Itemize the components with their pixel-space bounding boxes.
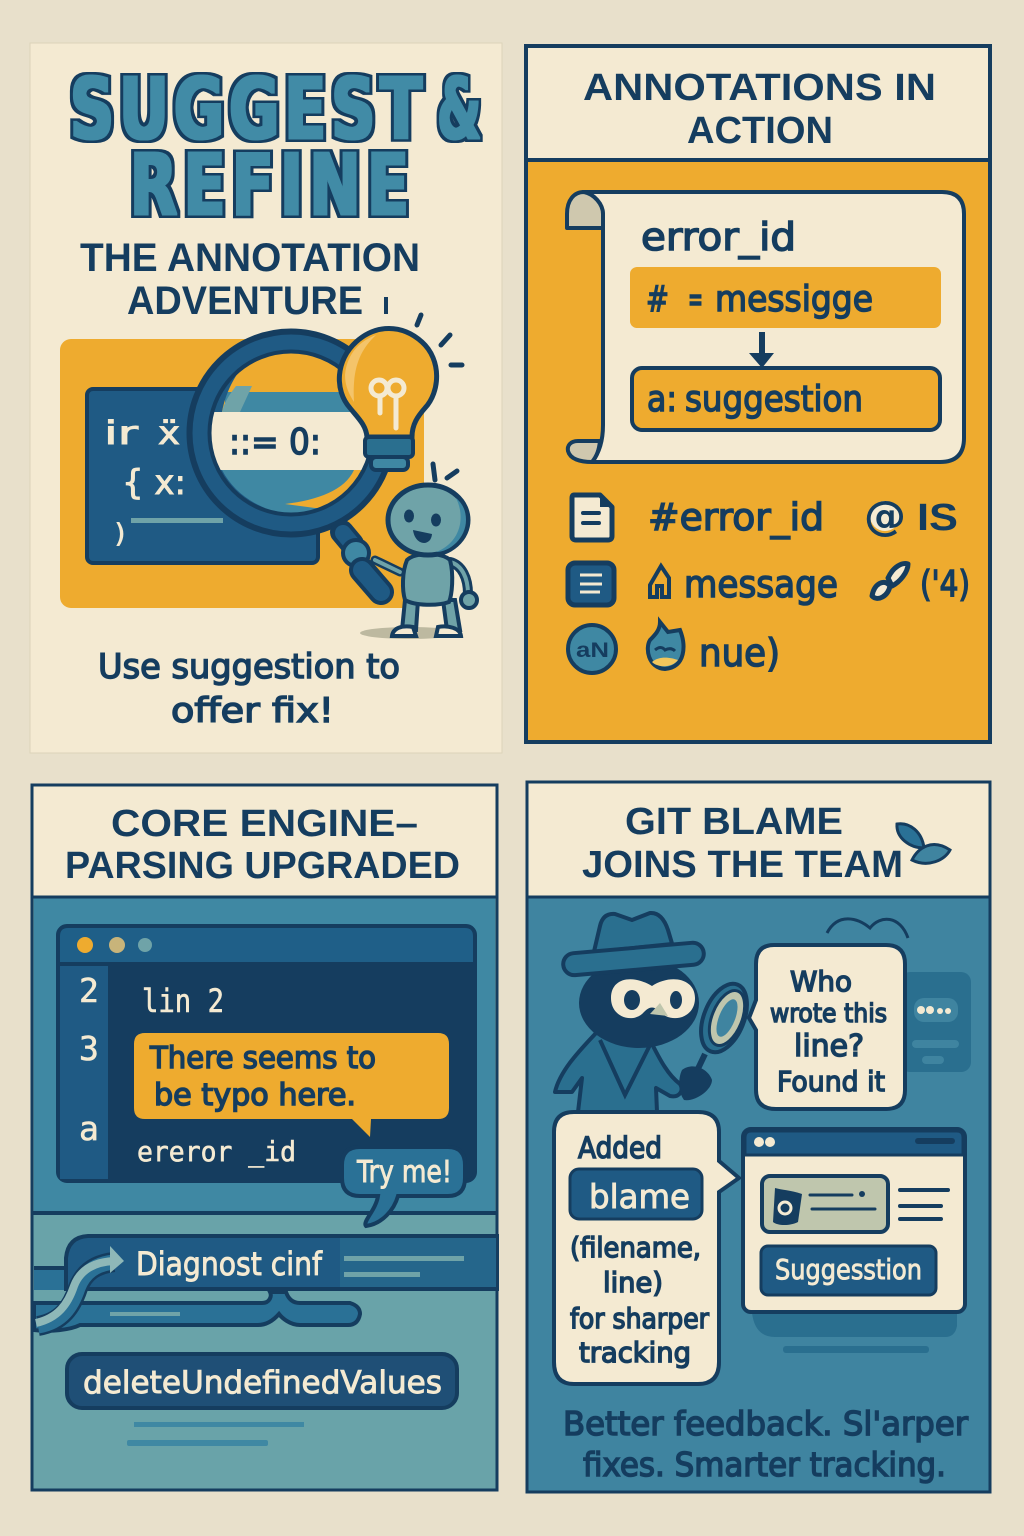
- field: error_id: #error_id: [648, 496, 824, 539]
- caption: offer fix!: [171, 691, 334, 731]
- speech bubble: who wrote this: Found it: [777, 1065, 885, 1098]
- icon: document: [572, 495, 612, 540]
- subtitle: THE ANNOTATION: [80, 236, 420, 280]
- panel heading: JOINS THE TEAM: [582, 844, 903, 886]
- title: [70, 60, 481, 235]
- deleteUndefinedValues pill: deleteUndefinedValues: [83, 1365, 442, 1401]
- speech bubble: added blame: line): [603, 1266, 663, 1299]
- orange message bar: [630, 267, 941, 328]
- coat: [555, 1033, 682, 1112]
- speech bubble: who wrote this: line?: [794, 1029, 864, 1064]
- at IS: @: [864, 492, 906, 540]
- orange message bar: =: [688, 279, 703, 320]
- code window: ẍ: [158, 414, 180, 452]
- light bulb: [339, 315, 462, 470]
- field: message: message: [684, 563, 838, 606]
- blame pill: blame: [589, 1177, 690, 1216]
- speech bubble: added blame: (filename,: [570, 1231, 701, 1264]
- code window: ir: [104, 414, 139, 452]
- try me bubble: [342, 1147, 465, 1226]
- panel: git blame joins the team: [527, 782, 990, 1492]
- code window: ): [115, 519, 125, 549]
- caption: fixes. Smarter tracking.: [583, 1445, 946, 1484]
- speech bubble: who wrote this: Who: [790, 965, 852, 998]
- code editor window: ereror _id: [137, 1135, 296, 1169]
- background arc: [827, 919, 908, 938]
- panel heading: PARSING UPGRADED: [65, 845, 460, 887]
- caption: [98, 647, 400, 731]
- arrow: curved: [36, 1246, 124, 1326]
- panel: core engine parsing upgraded: [32, 785, 497, 1490]
- code window: [87, 389, 318, 563]
- detective character: [555, 913, 756, 1112]
- at IS: [864, 492, 958, 540]
- blame pill: [570, 1169, 702, 1219]
- try me bubble: Try me!: [356, 1155, 452, 1190]
- magnifying glass: ::= 0:: [229, 422, 321, 463]
- icon: brush with value: ('4): [920, 564, 970, 605]
- field: value: nue): [699, 631, 780, 675]
- typo comment bubble: be typo here.: [154, 1078, 356, 1113]
- subtitle: ADVENTURE: [127, 279, 363, 323]
- magnifier: [679, 977, 756, 1100]
- suggestion box: a:: [647, 379, 677, 420]
- panel: annotations in action: [526, 46, 990, 742]
- code window: { x:: [122, 463, 186, 503]
- panel: suggest and refine title card: [30, 43, 502, 753]
- robot mascot: [360, 464, 477, 639]
- code editor window: [58, 926, 475, 1181]
- caption: [563, 1404, 968, 1484]
- diagnostics ribbon: [34, 1236, 497, 1331]
- code editor window: 3: [79, 1029, 99, 1068]
- caption: Better feedback. Sl'arper: [563, 1404, 968, 1443]
- orange message bar: messigge: [715, 279, 873, 320]
- speech bubble: who wrote this: wrote this: [770, 999, 887, 1029]
- scroll with annotation: [567, 192, 964, 462]
- speech bubble: added blame: [554, 1112, 739, 1384]
- suggestion button: [761, 1246, 936, 1295]
- panel heading: [526, 46, 990, 160]
- icon: flame mascot: [648, 622, 683, 669]
- code editor window: a: [79, 1109, 99, 1148]
- speech bubble: added blame: Added: [578, 1131, 662, 1165]
- speech bubble: who wrote this: [749, 945, 905, 1109]
- diagnostics ribbon: Diagnost cinf: [136, 1245, 323, 1283]
- orange backdrop: [60, 339, 424, 608]
- suggestion window: [743, 1129, 965, 1353]
- panel heading: GIT BLAME: [625, 801, 843, 843]
- speech bubble: added blame: for sharper: [570, 1302, 709, 1335]
- panel heading: ANNOTATIONS IN: [583, 67, 936, 109]
- suggestion button: Suggesstion: [775, 1253, 922, 1286]
- orange message bar: #: [646, 279, 669, 320]
- suggestion box: suggestion: [685, 379, 863, 420]
- deleteUndefinedValues pill: [67, 1354, 457, 1408]
- magnifier handle: [342, 532, 381, 592]
- at IS: IS: [917, 497, 958, 539]
- subtitle: [80, 236, 420, 323]
- scroll with annotation: error_id: [641, 215, 796, 259]
- panel heading: [32, 785, 497, 897]
- typo comment bubble: There seems to: [149, 1041, 376, 1076]
- icon: badge: aN: [576, 639, 609, 662]
- suggestion box: [632, 368, 940, 430]
- title: SUGGEST: [70, 60, 427, 159]
- suggestion card: [762, 1176, 948, 1232]
- arrow: [749, 332, 774, 368]
- icon: brush with value: [872, 564, 970, 605]
- panel heading: CORE ENGINE–: [111, 803, 418, 845]
- title: &: [437, 60, 481, 159]
- typo comment bubble: [134, 1033, 449, 1137]
- code editor window: 2: [79, 971, 99, 1010]
- caption: Use suggestion to: [98, 647, 400, 687]
- panel heading: [527, 782, 990, 897]
- background chat card: [900, 972, 971, 1072]
- placeholder lines: [127, 1422, 304, 1446]
- icon: leaf: [897, 824, 950, 863]
- code editor window: lin 2: [142, 982, 224, 1020]
- icon: list card: [568, 563, 614, 605]
- title: REFINE: [130, 136, 415, 235]
- magnifying glass: [199, 340, 383, 592]
- panel heading: ACTION: [687, 110, 833, 152]
- icon: badge: [568, 625, 616, 673]
- annotation field rows: [568, 492, 970, 675]
- speech bubble: added blame: tracking: [579, 1336, 691, 1369]
- head: [579, 958, 699, 1048]
